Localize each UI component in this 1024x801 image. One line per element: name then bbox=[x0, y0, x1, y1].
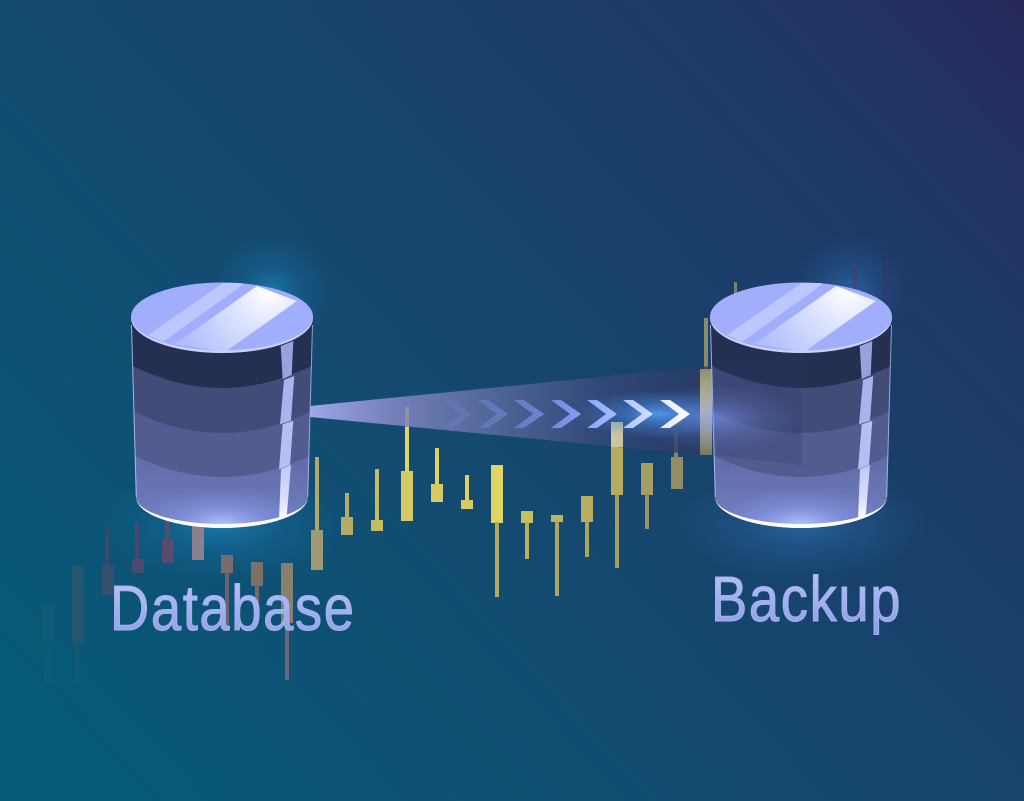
glow: database bbox=[97, 234, 347, 582]
beam between cylinders bbox=[310, 366, 748, 456]
cylinder: backup bbox=[704, 282, 898, 563]
glow: backup bbox=[676, 234, 926, 580]
chevron arrows bbox=[442, 400, 690, 428]
label: Database: Database bbox=[110, 572, 354, 644]
label: Backup: Backup bbox=[711, 563, 901, 635]
beam inside backup cylinder bbox=[633, 358, 803, 465]
candlestick chart bbox=[42, 255, 887, 685]
cylinder: database bbox=[125, 282, 319, 563]
